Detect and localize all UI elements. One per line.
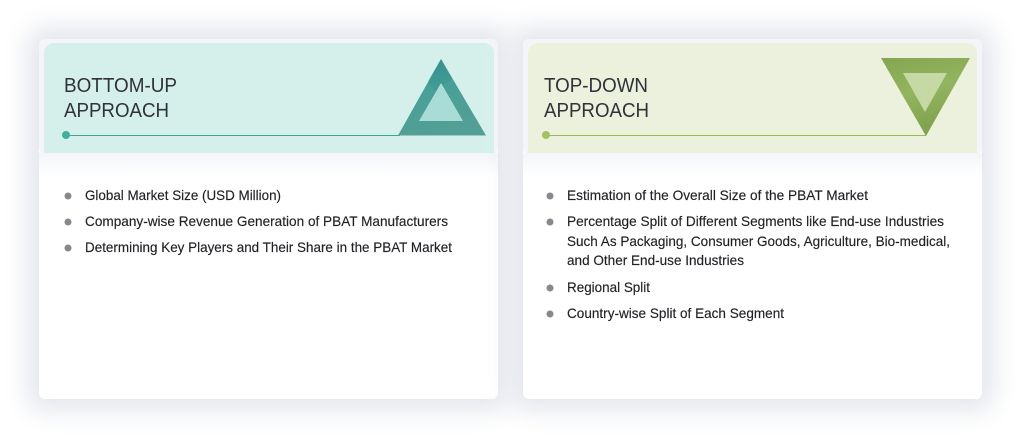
list: top-down items: Country-wise Split of Each Segment: [567, 305, 784, 321]
heading underline with dot: [62, 131, 400, 139]
list: top-down items: [546, 187, 950, 321]
list: bottom-up items: Company-wise Revenue Generation of PBAT Manufacturers: [85, 213, 448, 229]
heading: top-down approach: [544, 75, 649, 122]
header band: top-down: [528, 43, 977, 153]
list: top-down items: and Other End-use Industries: [567, 252, 744, 268]
header band: bottom-up: [44, 43, 494, 153]
heading: top-down approach: APPROACH: [544, 100, 649, 122]
heading: bottom-up approach: [64, 75, 177, 122]
list: bottom-up items: Global Market Size (USD Million): [85, 187, 281, 203]
icon: downward green triangle: [881, 58, 970, 136]
panel: top-down approach: [523, 39, 982, 399]
heading: bottom-up approach: APPROACH: [64, 100, 169, 122]
heading underline with dot: [542, 131, 926, 139]
heading: top-down approach: TOP-DOWN: [544, 75, 648, 97]
list: bottom-up items: Determining Key Players and Their Share in the PBAT Market: [85, 239, 452, 255]
panel: bottom-up approach: [39, 39, 498, 399]
list: top-down items: Regional Split: [567, 279, 650, 295]
list: top-down items: Percentage Split of Different Segments like End-use Industries: [567, 213, 944, 229]
heading: bottom-up approach: BOTTOM-UP: [64, 75, 177, 97]
list: top-down items: Such As Packaging, Consumer Goods, Agriculture, Bio-medical,: [567, 233, 950, 249]
list: top-down items: Estimation of the Overall Size of the PBAT Market: [567, 187, 868, 203]
list: bottom-up items: [64, 187, 452, 255]
icon: upward teal triangle: [398, 59, 486, 136]
